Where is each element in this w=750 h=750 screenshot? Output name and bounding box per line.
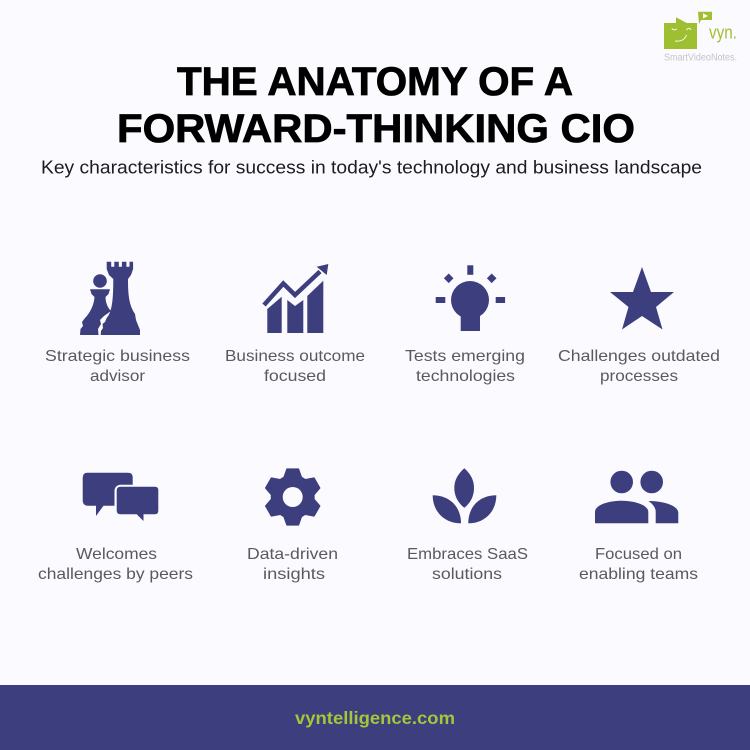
- label: [407, 546, 528, 583]
- label: [558, 348, 720, 385]
- logo: vyn SmartVideoNotes: SmartVideoNotes.: [664, 52, 737, 64]
- label: Data-driven: [247, 546, 338, 563]
- icon: rising bar chart with arrow: [264, 264, 328, 333]
- label: Embraces SaaS: [407, 546, 528, 563]
- label: technologies: [416, 368, 515, 385]
- label: Strategic business: [45, 348, 190, 365]
- label: challenges by peers: [38, 566, 193, 583]
- title: FORWARD-THINKING CIO: [117, 107, 635, 151]
- icon: speech bubbles: [83, 473, 160, 521]
- item: business outcome focused: [225, 264, 365, 385]
- label: enabling teams: [579, 566, 698, 583]
- label: advisor: [90, 368, 146, 385]
- label: [405, 348, 525, 385]
- footer url: vyntelligence.com: [295, 708, 455, 728]
- logo: vyn SmartVideoNotes: vyn.: [709, 22, 737, 42]
- footer band: [0, 685, 750, 750]
- icon: three-leaf plant: [433, 468, 496, 523]
- label: Focused on: [595, 546, 682, 563]
- label: focused: [264, 368, 326, 385]
- label: [38, 546, 193, 583]
- icon: chess pawn and rook: [80, 262, 140, 335]
- label: [225, 348, 365, 385]
- label: insights: [263, 566, 325, 583]
- title: THE ANATOMY OF A: [177, 60, 573, 104]
- icon: star: [610, 267, 674, 330]
- subtitle: Key characteristics for success in today's technology and business landscape: [41, 158, 702, 178]
- icon: gear: [264, 469, 321, 525]
- label: [45, 348, 190, 385]
- item: challenges outdated processes: [558, 267, 720, 385]
- label: processes: [600, 368, 678, 385]
- title: [117, 60, 635, 151]
- item: focused on enabling teams: [579, 471, 698, 583]
- item: data-driven insights: [247, 469, 338, 583]
- item: strategic business advisor: [45, 262, 190, 385]
- item: embraces saas solutions: [407, 468, 528, 583]
- label: solutions: [432, 566, 502, 583]
- label: Challenges outdated: [558, 348, 720, 365]
- item: welcomes challenges by peers: [38, 473, 193, 583]
- label: [247, 546, 338, 583]
- label: Business outcome: [225, 348, 365, 365]
- item: tests emerging technologies: [405, 265, 525, 385]
- icon: light bulb: [436, 265, 505, 331]
- label: Tests emerging: [405, 348, 525, 365]
- icon: two people: [595, 471, 678, 523]
- label: [579, 546, 698, 583]
- label: Welcomes: [76, 546, 157, 563]
- logo: vyn SmartVideoNotes: [664, 12, 737, 63]
